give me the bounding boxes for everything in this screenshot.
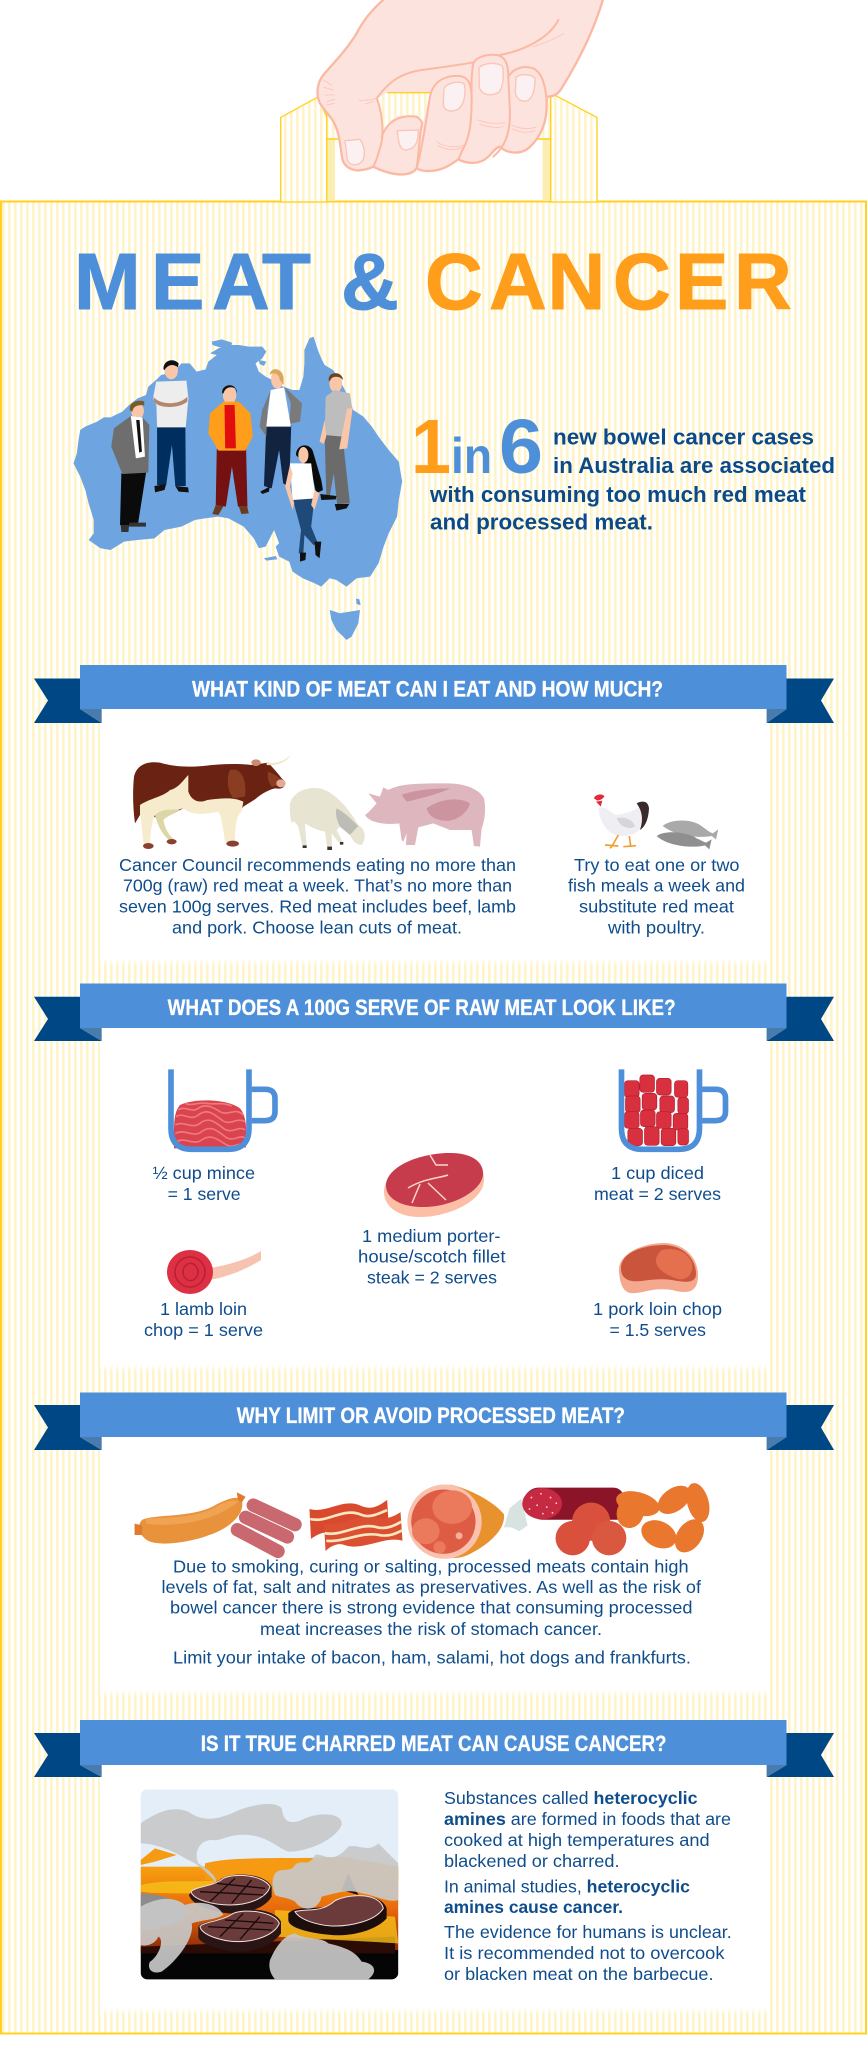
icon: cow: [133, 754, 291, 849]
panel: charred meat: [34, 1720, 834, 2015]
steak: [198, 1910, 281, 1952]
text: diced meat: [594, 1163, 721, 1204]
title: MEAT: [74, 237, 311, 326]
ribbon heading: WHAT KIND OF MEAT CAN I EAT AND HOW MUCH?: [192, 676, 663, 702]
text: heterocyclic amines: In animal studies, heterocyclic: [444, 1876, 690, 1896]
text: half cup mince: [153, 1163, 255, 1204]
person: woman in white top: [285, 445, 323, 562]
text: bowel cancer statistic: new bowel cancer cases: [553, 424, 814, 450]
icon: salami: [522, 1488, 626, 1555]
text: heterocyclic amines: or blacken meat on the barbecue.: [444, 1964, 714, 1984]
text: heterocyclic amines: The evidence for humans is unclear.: [444, 1922, 732, 1942]
text: red meat recommendation: [119, 855, 516, 938]
ribbon heading: [34, 984, 834, 1041]
text: heterocyclic amines: Substances called heterocyclic: [444, 1788, 698, 1808]
text: steak: [358, 1226, 506, 1288]
text: red meat recommendation: and pork. Choose lean cuts of meat.: [172, 918, 462, 938]
icon: frankfurters: [228, 1496, 304, 1560]
text: half cup mince: = 1 serve: [168, 1184, 241, 1204]
ribbon heading: WHAT DOES A 100G SERVE OF RAW MEAT LOOK LIKE?: [168, 995, 676, 1020]
text: why processed meat is harmful: meat increases the risk of stomach cancer.: [260, 1619, 602, 1639]
text: fish and poultry recommendation: Try to eat one or two: [574, 855, 740, 875]
text: why processed meat is harmful: [162, 1557, 701, 1668]
statistic: 1 in 6: [411, 404, 835, 534]
text: steak: 1 medium porter-: [362, 1226, 501, 1246]
text: lamb loin chop: 1 lamb loin: [160, 1299, 247, 1319]
ribbon heading: [34, 1720, 834, 1777]
ribbon heading: IS IT TRUE CHARRED MEAT CAN CAUSE CANCER?: [201, 1731, 667, 1756]
icon: lamb loin chop: [167, 1250, 261, 1294]
statistic: 1 in 6: in: [451, 428, 492, 484]
illustration: steaks on barbecue: [141, 1789, 398, 1980]
icons: processed meats: [135, 1480, 713, 1560]
icon: porterhouse steak: [384, 1153, 484, 1217]
bag handle: [281, 93, 597, 202]
text: diced meat: meat = 2 serves: [594, 1184, 721, 1204]
ribbon heading: [34, 1392, 834, 1450]
icons: chicken and fish: [594, 795, 718, 849]
icon: pork loin chop: [619, 1243, 698, 1293]
text: pork loin chop: 1 pork loin chop: [593, 1299, 722, 1319]
statistic: 1 in 6: 1: [411, 404, 451, 490]
map of Australia with people: [73, 337, 402, 640]
text: steak: steak = 2 serves: [367, 1268, 497, 1288]
text: why processed meat is harmful: Due to smoking, curing or salting, processed meats contain high: [173, 1557, 689, 1577]
text: why processed meat is harmful: levels of fat, salt and nitrates as preservatives. As well as the risk of: [162, 1577, 701, 1597]
text: half cup mince: ½ cup mince: [153, 1163, 255, 1183]
text: fish and poultry recommendation: with poultry.: [607, 918, 705, 938]
text: bowel cancer statistic: in Australia are associated: [553, 453, 835, 478]
map: Australia: [73, 337, 402, 640]
text: why processed meat is harmful: Limit your intake of bacon, ham, salami, hot dogs and frankfurts.: [173, 1648, 691, 1668]
text: why processed meat is harmful: bowel cancer there is strong evidence that consuming processed: [170, 1598, 692, 1618]
title: [74, 237, 792, 326]
person: woman with grey cardigan: [260, 369, 302, 494]
icon: chicken: [594, 795, 649, 848]
panel: processed meat: [34, 1392, 834, 1697]
ribbon heading: WHY LIMIT OR AVOID PROCESSED MEAT?: [237, 1403, 625, 1428]
text: heterocyclic amines: amines are formed in foods that are: [444, 1809, 731, 1829]
icon: fish: [657, 820, 718, 849]
icon: bacon: [309, 1500, 402, 1551]
icon: pig: [365, 783, 485, 847]
smoke: [141, 1804, 398, 1979]
person: man in orange jacket: [208, 385, 253, 515]
icon: cup of diced meat: [621, 1069, 725, 1149]
panel: 100g serve of raw meat: [34, 984, 834, 1372]
text: steak: house/scotch fillet: [358, 1246, 506, 1266]
text: fish and poultry recommendation: substitute red meat: [579, 896, 734, 916]
text: bowel cancer statistic: and processed meat.: [430, 510, 653, 534]
text: bowel cancer statistic: with consuming too much red meat: [429, 482, 806, 507]
person: man in grey polo: [320, 373, 353, 511]
text: pork loin chop: = 1.5 serves: [610, 1320, 706, 1340]
text: fish and poultry recommendation: fish meals a week and: [568, 876, 745, 896]
icon: ham: [407, 1485, 528, 1559]
steak: [141, 1893, 187, 1930]
text: pork loin chop: [593, 1299, 722, 1340]
text: red meat recommendation: 700g (raw) red meat a week. That’s no more than: [123, 876, 512, 896]
steak: [189, 1875, 272, 1913]
text: heterocyclic amines: [444, 1788, 732, 1984]
icon: sausage: [135, 1492, 246, 1544]
person: man in white t-shirt: [153, 360, 189, 492]
icons: cow, sheep and pig: [133, 754, 485, 850]
panel: what kind of meat: [34, 665, 834, 966]
text: lamb loin chop: [144, 1299, 263, 1340]
statistic: 1 in 6: 6: [499, 404, 543, 490]
text: heterocyclic amines: cooked at high temperatures and: [444, 1830, 710, 1850]
ribbon heading: [34, 665, 834, 723]
text: red meat recommendation: Cancer Council recommends eating no more than: [119, 855, 516, 875]
title: &: [341, 237, 399, 326]
steak: [288, 1895, 387, 1935]
text: red meat recommendation: seven 100g serves. Red meat includes beef, lamb: [119, 896, 516, 916]
people group: [111, 360, 353, 562]
icon: half cup of mince: [171, 1069, 275, 1149]
icon: hand holding bag: [318, 0, 603, 174]
text: diced meat: 1 cup diced: [611, 1163, 704, 1183]
title: CANCER: [425, 237, 792, 326]
text: lamb loin chop: chop = 1 serve: [144, 1320, 263, 1340]
text: heterocyclic amines: amines cause cancer.: [444, 1897, 623, 1917]
icon: sausage chain: [613, 1480, 713, 1558]
text: heterocyclic amines: It is recommended not to overcook: [444, 1943, 725, 1963]
icon: sheep: [290, 788, 365, 850]
text: heterocyclic amines: blackened or charred.: [444, 1851, 620, 1871]
person: man in suit: [111, 401, 149, 532]
text: bowel cancer statistic: [429, 424, 835, 534]
text: fish and poultry recommendation: [568, 855, 745, 938]
